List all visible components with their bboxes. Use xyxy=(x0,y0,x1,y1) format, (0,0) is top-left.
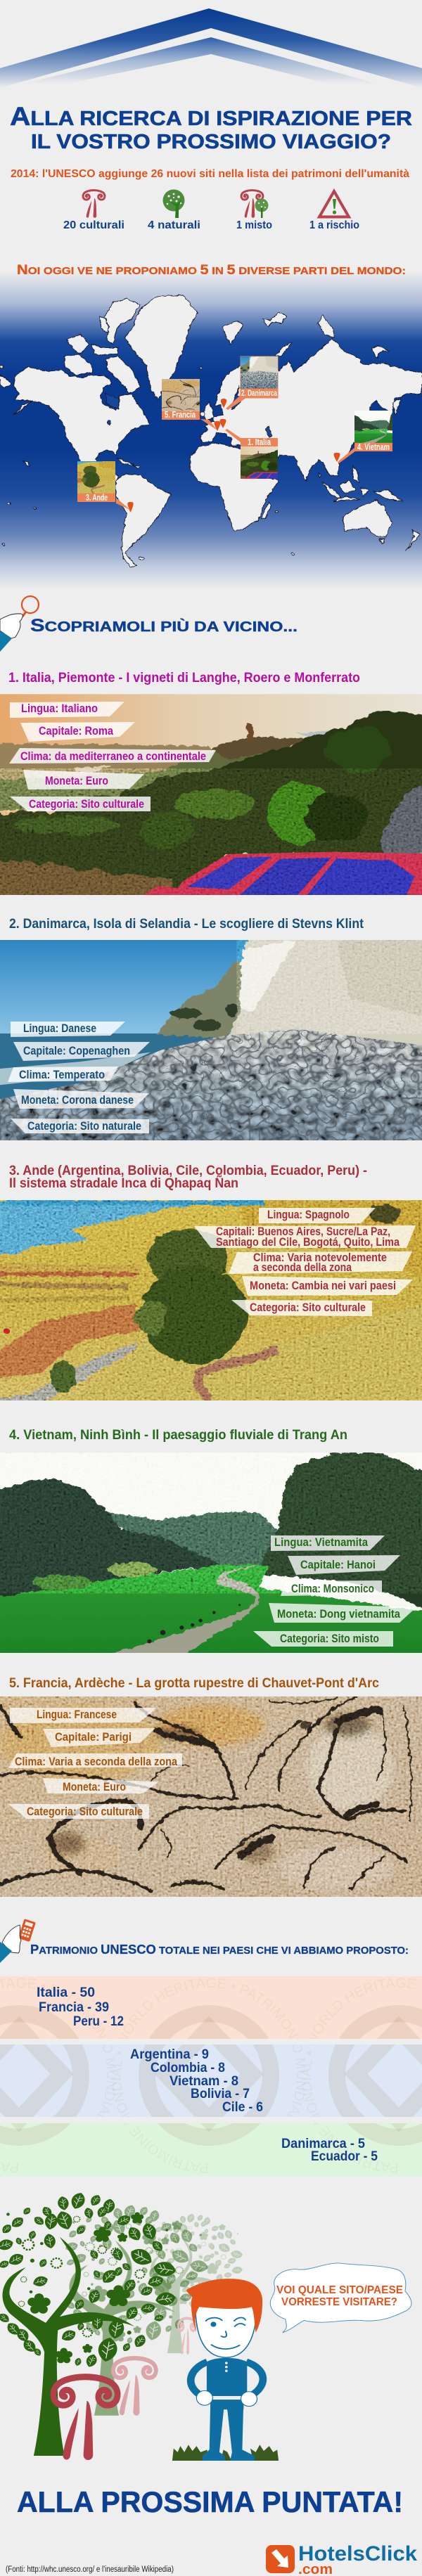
counts: group 2: Vietnam - 8 xyxy=(170,2073,238,2089)
continents xyxy=(0,295,422,567)
fact labels: Ande: Categoria: Sito culturale xyxy=(250,1301,366,1314)
fact labels: Italia: Moneta: Euro xyxy=(45,775,108,787)
fact labels: Ande: Lingua: Spagnolo xyxy=(267,1209,350,1221)
facial features xyxy=(206,2318,245,2349)
fact labels: Ande: a seconda della zona xyxy=(253,1261,352,1274)
fact labels: Ande: Clima: Varia notevolemente xyxy=(253,1251,387,1264)
fact labels: Italia: Lingua: Italiano xyxy=(21,702,98,715)
title: IL VOSTRO PROSSIMO VIAGGIO? xyxy=(31,131,391,153)
fact labels: Ande: Moneta: Cambia nei vari paesi xyxy=(250,1280,396,1292)
fact labels: Danimarca: Lingua: Danese xyxy=(23,1022,96,1035)
heading: Vietnam: 4. Vietnam, Ninh Bình - Il paesaggio fluviale di Trang An xyxy=(9,1427,347,1443)
fact labels: Vietnam xyxy=(253,1535,416,1647)
illustration: trees and columns xyxy=(0,2191,243,2460)
world map panel xyxy=(0,271,422,591)
heading: Ande: Il sistema stradale Inca di Qhapaq Ñan xyxy=(9,1175,238,1191)
counts: group 1: Italia - 50 xyxy=(37,1985,95,2000)
speech bubble: VORRESTE VISITARE? xyxy=(281,2296,397,2308)
heading: patrimonio UNESCO totale: PATRIMONIO UNESCO TOTALE NEI PAESI CHE VI ABBIAMO PROPOSTO: xyxy=(30,1943,409,1957)
fact labels: Francia xyxy=(8,1708,182,1819)
counts: group 1: Francia - 39 xyxy=(39,1999,109,2015)
photo: Trang An landscape xyxy=(0,1453,422,1658)
counts: group 3: Ecuador - 5 xyxy=(311,2149,378,2164)
counts: group 2: Cile - 6 xyxy=(222,2099,263,2115)
roof header shape xyxy=(0,8,422,88)
icon: hand with calculator xyxy=(0,1919,36,1963)
heading: Ande xyxy=(9,1163,367,1191)
thumbnail: Ande xyxy=(77,461,115,502)
heading: Francia: 5. Francia, Ardèche - La grotta rupestre di Chauvet-Pont d'Arc xyxy=(9,1675,379,1691)
photo: vineyards of Piemonte xyxy=(0,694,422,900)
logo: HotelsClick xyxy=(266,2542,417,2576)
logo: HotelsClick: HotelsClick xyxy=(298,2542,417,2565)
fact labels: Francia: Clima: Varia a seconda della zona xyxy=(15,1756,178,1768)
stat: naturali: 4 naturali xyxy=(148,219,200,231)
stat: a rischio: 1 a rischio xyxy=(309,219,359,231)
watermark: World Heritage emblem: PATRIMOINE MONDIAL • WORLD HERITAGE • PATRIMONIO MUNDIAL xyxy=(111,1978,307,2172)
fact labels: Ande: Santiago del Cile, Bogotá, Quito, Lima xyxy=(216,1236,400,1249)
fact labels: Ande xyxy=(194,1208,416,1316)
fact labels: Danimarca xyxy=(8,1022,150,1133)
speech bubble: VOI QUALE SITO/PAESE xyxy=(276,2284,403,2296)
fact labels: Francia: Lingua: Francese xyxy=(37,1708,117,1721)
pins xyxy=(127,399,340,513)
stats row xyxy=(63,190,359,231)
closing headline: ALLA PROSSIMA PUNTATA! xyxy=(17,2485,403,2518)
thumbnail: Francia xyxy=(158,379,226,420)
counts: group 3 xyxy=(281,2136,378,2164)
band: peach xyxy=(0,1976,422,2039)
heading: noi oggi: NOI OGGI VE NE PROPONIAMO 5 IN 5 DIVERSE PARTI DEL MONDO: xyxy=(17,263,406,278)
fact labels: Francia: Capitale: Parigi xyxy=(55,1731,132,1744)
fact labels: Vietnam: Capitale: Hanoi xyxy=(300,1559,376,1571)
subtitle: 2014: l'UNESCO aggiunge 26 nuovi siti nella lista dei patrimoni dell'umanità xyxy=(11,168,409,180)
thumbnail: Danimarca xyxy=(241,356,279,398)
fact labels: Vietnam: Categoria: Sito misto xyxy=(280,1632,379,1645)
icon: column and tree xyxy=(241,191,269,218)
fact labels: Danimarca: Clima: Temperato xyxy=(19,1069,105,1081)
heading: Ande: 3. Ande (Argentina, Bolivia, Cile, Colombia, Ecuador, Peru) - xyxy=(9,1163,367,1178)
fact labels: Francia: Categoria: Sito culturale xyxy=(27,1805,143,1818)
icon: column xyxy=(83,191,105,218)
watermark: World Heritage emblem xyxy=(0,1978,422,2172)
photo: Stevns Klint cliffs xyxy=(0,937,422,1140)
counts: group 1: Peru - 12 xyxy=(73,2014,124,2029)
fact labels: Vietnam: Clima: Monsonico xyxy=(291,1583,374,1595)
thumbnail: Francia: 5. Francia xyxy=(165,410,196,420)
face xyxy=(195,2301,257,2357)
counts: group 1 xyxy=(37,1985,124,2029)
heading: Italia: 1. Italia, Piemonte - I vigneti di Langhe, Roero e Monferrato xyxy=(8,670,360,685)
character: boy xyxy=(172,2279,279,2461)
photo: Andes landscape xyxy=(0,1200,422,1404)
clothes xyxy=(191,2358,263,2461)
counts: group 2: Bolivia - 7 xyxy=(191,2086,250,2101)
band: green xyxy=(0,2123,422,2177)
speech bubble xyxy=(270,2263,411,2333)
fact labels: Italia: Capitale: Roma xyxy=(39,725,114,738)
title xyxy=(10,102,412,153)
stat: culturali: 20 culturali xyxy=(63,219,124,231)
icon: hand with magnifier xyxy=(0,596,39,652)
thumbnail: Italia: 1. Italia xyxy=(248,437,271,447)
stat: misto: 1 misto xyxy=(236,219,272,231)
counts: group 2 xyxy=(130,2047,263,2115)
connector wedges xyxy=(116,396,355,510)
fact labels: Danimarca: Categoria: Sito naturale xyxy=(27,1120,141,1133)
fact labels: Ande: Capitali: Buenos Aires, Sucre/La Paz, xyxy=(216,1225,390,1238)
hair xyxy=(186,2279,262,2333)
photo: Chauvet cave paintings xyxy=(0,1696,422,1898)
counts: group 3: Danimarca - 5 xyxy=(281,2136,365,2151)
counts: group 2: Colombia - 8 xyxy=(151,2060,225,2075)
fact labels: Vietnam: Moneta: Dong vietnamita xyxy=(277,1608,401,1621)
icon: warning triangle xyxy=(319,191,349,217)
thumbnail: Danimarca: 2. Danimarca xyxy=(241,389,277,398)
thumbnail: Italia xyxy=(241,438,278,479)
heading: Danimarca: 2. Danimarca, Isola di Selandia - Le scogliere di Stevns Klint xyxy=(9,916,364,932)
title: ALLA RICERCA DI ISPIRAZIONE PER xyxy=(10,102,412,131)
fact labels: Italia: Categoria: Sito culturale xyxy=(29,798,144,811)
counts: group 2: Argentina - 9 xyxy=(130,2047,209,2062)
fact labels: Italia xyxy=(9,702,216,811)
sources: (Fonti: http://whc.unesco.org/ e l'inesauribile Wikipedia) xyxy=(6,2565,174,2574)
grass xyxy=(172,2445,279,2461)
icon: tree xyxy=(163,190,184,218)
band: blue xyxy=(0,2044,422,2117)
thumbnail: Vietnam xyxy=(354,411,392,451)
heading: scopriamoli: SCOPRIAMOLI PIÙ DA VICINO... xyxy=(30,616,298,636)
fact labels: Danimarca: Capitale: Copenaghen xyxy=(23,1045,130,1057)
fact labels: Italia: Clima: da mediterraneo a continentale xyxy=(20,750,206,763)
thumbnail: Ande: 3. Ande xyxy=(86,493,108,503)
fact labels: Danimarca: Moneta: Corona danese xyxy=(21,1094,134,1107)
hands xyxy=(196,2390,257,2407)
fact labels: Francia: Moneta: Euro xyxy=(63,1781,126,1793)
thumbnail: Vietnam: 4. Vietnam xyxy=(357,442,390,452)
fact labels: Vietnam: Lingua: Vietnamita xyxy=(274,1536,369,1549)
